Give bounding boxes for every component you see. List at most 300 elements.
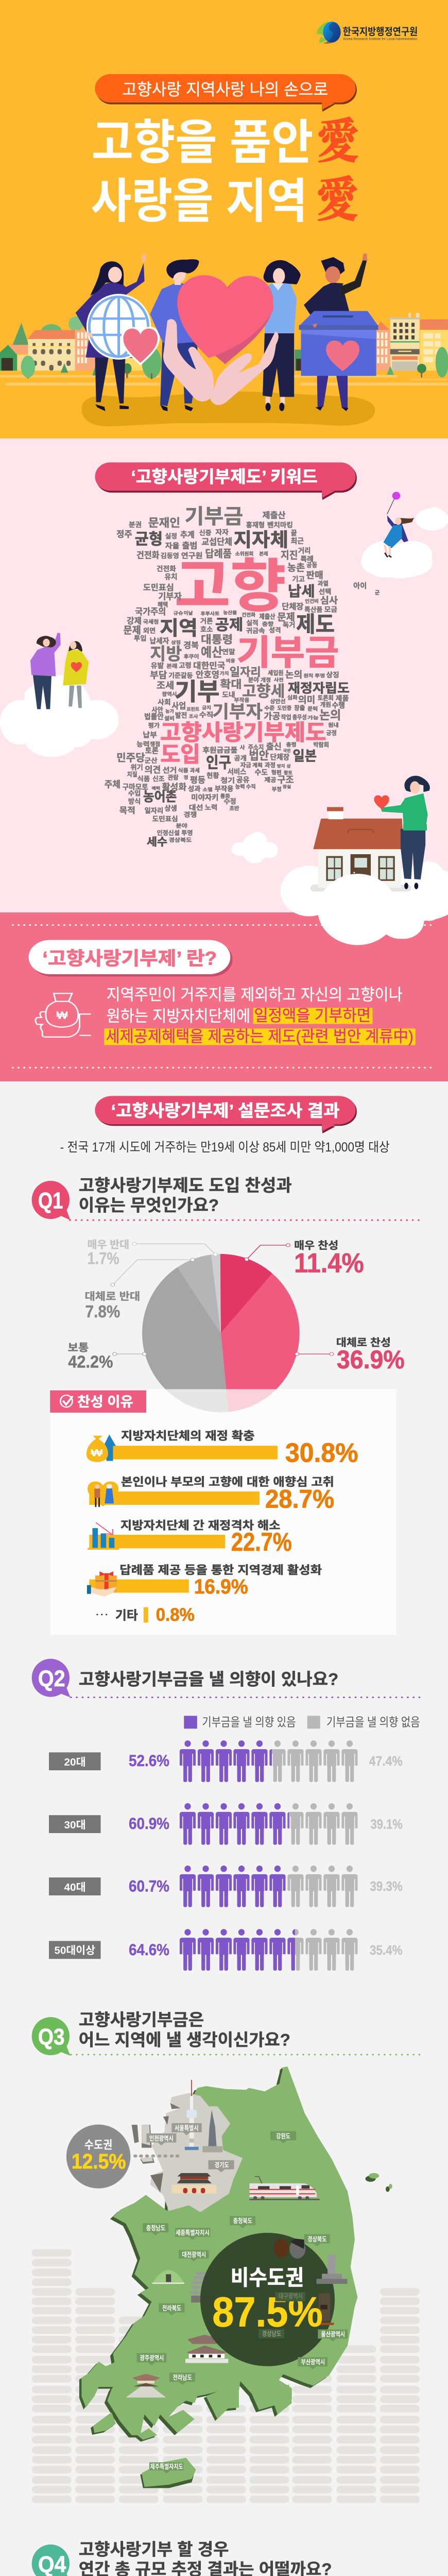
word cloud: 선택 bbox=[319, 588, 331, 596]
heading: Q1: 고향사랑기부제도 도입 찬성과 bbox=[79, 1176, 292, 1195]
word cloud: 수준 bbox=[264, 705, 275, 711]
callout: somewhat favorable bbox=[295, 1337, 405, 1374]
word cloud: 사 bbox=[240, 744, 245, 751]
word cloud: 기부자 bbox=[158, 591, 182, 601]
word cloud: 능력 bbox=[136, 740, 150, 748]
word cloud: 아이 bbox=[353, 582, 367, 590]
word cloud: 관람 bbox=[168, 774, 179, 781]
word cloud: 교섭단체 bbox=[201, 537, 232, 547]
section: Q4 bbox=[32, 2540, 421, 2576]
text block: definition: 일정액을 기부하면 bbox=[254, 1007, 371, 1025]
badge: Q2 bbox=[32, 1659, 71, 1698]
word cloud: 일자리 bbox=[145, 807, 163, 815]
word cloud: 유치 bbox=[164, 573, 177, 581]
text block: definition: 원하는 지방자치단체에 bbox=[107, 1008, 250, 1025]
bar: other bbox=[96, 1605, 195, 1625]
map labels: regions: 경기도 bbox=[215, 2161, 229, 2168]
bar: local economy: 답례품 제공 등을 통한 지역경제 활성화 bbox=[119, 1564, 322, 1577]
word cloud: 수입 bbox=[128, 789, 141, 797]
map labels: regions: 경상북도 bbox=[307, 2235, 326, 2243]
legend bbox=[184, 1715, 420, 1729]
section: Q3 bbox=[32, 2010, 421, 2503]
icon: cheomseongdae, pagoda, tomb, temples bbox=[126, 2270, 228, 2398]
word cloud: 김동영 bbox=[161, 552, 179, 560]
word cloud: 위기 bbox=[130, 763, 143, 771]
person: woman in light blue bbox=[263, 260, 301, 411]
word cloud: 소위원회 bbox=[235, 551, 253, 557]
word cloud: 유발 bbox=[151, 662, 164, 669]
word cloud: 과세 bbox=[190, 767, 200, 774]
map labels: regions: 강원도 bbox=[276, 2132, 290, 2140]
word cloud: 수직 bbox=[199, 710, 213, 719]
word cloud: 자율 bbox=[165, 542, 180, 550]
word cloud: 충향 bbox=[262, 621, 273, 628]
title: 愛 bbox=[316, 162, 358, 230]
pictogram row: age 30s: 60.9% bbox=[129, 1815, 169, 1833]
word cloud: 미야자키 bbox=[191, 794, 218, 802]
word cloud: 부작용 bbox=[234, 698, 250, 704]
word cloud: 기준갈등 bbox=[168, 672, 193, 679]
callout: somewhat favorable: 36.9% bbox=[337, 1345, 405, 1374]
word cloud: 연구원 bbox=[181, 552, 202, 560]
word cloud: 활성화 bbox=[162, 782, 186, 792]
icon: hand holding money bag: ₩ bbox=[56, 1009, 68, 1021]
word cloud: 최근 bbox=[290, 537, 304, 546]
word cloud: 기부자 bbox=[212, 702, 263, 722]
word cloud: 조세 bbox=[157, 680, 174, 691]
word cloud: 단체장 bbox=[282, 602, 304, 611]
word cloud: 법안 bbox=[249, 749, 269, 762]
bar: fiscal expansion bbox=[87, 1430, 358, 1468]
word cloud: 납부 bbox=[143, 731, 157, 739]
word cloud: 문제 bbox=[277, 612, 295, 623]
map labels: regions: 서울특별시 bbox=[175, 2125, 199, 2132]
word cloud: 정주 bbox=[116, 530, 132, 539]
word cloud: 지방 bbox=[150, 645, 182, 664]
heading: Q4 bbox=[79, 2540, 332, 2576]
word cloud: 목적 bbox=[119, 806, 135, 815]
bar: closing fiscal gap: 22.7% bbox=[231, 1528, 292, 1556]
bar: other: 기타 bbox=[115, 1608, 138, 1622]
map labels: regions: 전라남도 bbox=[173, 2374, 192, 2381]
word cloud: 구마모토 bbox=[123, 783, 148, 791]
logo: top: 한국지방행정연구원 bbox=[343, 26, 418, 38]
word cloud: 문턱 bbox=[307, 706, 318, 712]
heading: what is the donation system pill bbox=[29, 940, 233, 977]
word cloud: 부작용 bbox=[215, 785, 234, 793]
word cloud: 건전화 bbox=[242, 612, 255, 618]
pictogram row: age 40s bbox=[49, 1866, 403, 1907]
word cloud: 식품 bbox=[137, 775, 150, 783]
word cloud: 식품 bbox=[178, 768, 188, 774]
word cloud: 고향 bbox=[175, 554, 286, 618]
map labels: regions: 제주특별자치도 bbox=[150, 2463, 183, 2470]
word cloud: 기부 bbox=[175, 679, 220, 706]
word cloud: 자금 bbox=[240, 762, 251, 769]
word cloud: 외면 bbox=[143, 627, 156, 634]
map labels: regions: 인천광역시 bbox=[149, 2134, 174, 2142]
map labels: regions: 부산광역시 bbox=[301, 2359, 325, 2366]
legend: 기부금을 낼 의향 있음 bbox=[202, 1715, 296, 1729]
word cloud: 기부금 bbox=[184, 504, 243, 528]
pictogram row: age 50 and over: 35.4% bbox=[370, 1943, 403, 1958]
panel: survey background bbox=[0, 1081, 448, 2576]
word cloud: 국가주의 bbox=[135, 607, 166, 617]
word cloud: 능력 bbox=[235, 784, 245, 790]
word cloud: 인정신설 투명 bbox=[157, 830, 193, 836]
word cloud: 방식 bbox=[128, 798, 141, 805]
illustration: town buildings bbox=[0, 313, 448, 385]
word cloud: 공동 bbox=[306, 562, 317, 569]
word cloud: 법률안 bbox=[144, 713, 164, 721]
callout: survey heading bubble bbox=[95, 1096, 357, 1133]
bar: closing fiscal gap bbox=[88, 1519, 292, 1556]
word cloud: 쟁점 bbox=[150, 741, 160, 748]
word cloud: 비용 bbox=[226, 658, 235, 664]
bar: hometown affection: 28.7% bbox=[265, 1485, 334, 1513]
word cloud: 총무성 bbox=[292, 714, 307, 721]
word cloud: 계획 bbox=[252, 762, 263, 769]
callout: keyword heading bubble: ‘고향사랑기부제도’ 키워드 bbox=[131, 468, 318, 486]
word cloud: 본래 bbox=[259, 551, 268, 557]
word cloud: 의견 bbox=[145, 765, 161, 775]
word cloud: 부담 bbox=[150, 670, 167, 680]
word cloud: 수행 bbox=[332, 702, 345, 710]
map labels: regions: 울산광역시 bbox=[321, 2331, 345, 2338]
word cloud: 농가 bbox=[165, 708, 174, 714]
word cloud: 공제 bbox=[215, 617, 243, 633]
word cloud: 설비 bbox=[164, 715, 175, 722]
word cloud: 초반 bbox=[230, 805, 239, 811]
word cloud: 세수 bbox=[147, 836, 167, 848]
word cloud: 혜택 bbox=[158, 602, 168, 608]
stat: non-capital area share: 87.5% bbox=[212, 2289, 323, 2335]
word cloud: 수정 bbox=[223, 798, 236, 805]
pictogram row: age 50 and over: 50대이상 bbox=[55, 1944, 95, 1956]
bar: fiscal expansion: 지방자치단체의 재정 확충 bbox=[121, 1430, 254, 1443]
badge: Q4 bbox=[32, 2545, 71, 2576]
word cloud: 고령 bbox=[179, 661, 192, 669]
word cloud bbox=[105, 504, 380, 848]
word cloud: 호소 bbox=[200, 625, 213, 633]
word cloud: 본래 bbox=[166, 663, 177, 669]
word cloud: 문재인 bbox=[148, 516, 180, 529]
badge: Q1: Q1 bbox=[38, 1188, 63, 1213]
callout: somewhat opposed bbox=[84, 1258, 195, 1321]
word cloud: 금지 bbox=[202, 705, 211, 710]
word cloud: 노력 bbox=[205, 804, 217, 811]
bar: fiscal expansion: 30.8% bbox=[285, 1438, 358, 1468]
callout: somewhat opposed: 7.8% bbox=[85, 1302, 120, 1321]
stat: capital area share: 수도권 bbox=[84, 2139, 112, 2151]
callout: very favorable: 11.4% bbox=[294, 1248, 364, 1278]
word cloud: 가치 bbox=[220, 671, 229, 676]
word cloud: 규슈 bbox=[174, 611, 183, 616]
word cloud: 도민표심 bbox=[143, 583, 174, 592]
callout: somewhat favorable: 대체로 찬성 bbox=[336, 1337, 391, 1348]
tag: reasons for support: 찬성 이유 bbox=[77, 1394, 133, 1410]
word cloud: 민주당 bbox=[116, 752, 145, 764]
callout: keyword heading bubble bbox=[95, 462, 357, 500]
word cloud: 일본 bbox=[292, 749, 317, 764]
word cloud: 청기 bbox=[220, 776, 235, 784]
word cloud: 이날 bbox=[184, 610, 193, 616]
word cloud: 사전 bbox=[274, 677, 284, 682]
word cloud: 홍재형 bbox=[246, 521, 265, 529]
logo: top: Korea Research Institute for Local Administration bbox=[343, 38, 418, 41]
pictogram row: age 40s: 39.3% bbox=[370, 1879, 403, 1894]
word cloud: 신조 bbox=[152, 775, 165, 783]
word cloud: 거론 bbox=[200, 617, 213, 625]
illustration: house with woman on cloud bbox=[231, 776, 448, 945]
word cloud: 개원 bbox=[320, 701, 331, 708]
word cloud: 인건비 bbox=[305, 598, 319, 604]
callout: very opposed bbox=[87, 1239, 217, 1268]
word cloud: 대통령 bbox=[201, 633, 233, 646]
panel: header background bbox=[0, 0, 448, 438]
word cloud: 경상북도 bbox=[169, 837, 192, 843]
word cloud: 분권 bbox=[129, 521, 142, 529]
word cloud: 균형 bbox=[135, 531, 163, 548]
word cloud: 출신 bbox=[266, 742, 282, 751]
word cloud: 예산 bbox=[201, 645, 222, 659]
word cloud: 단체장 bbox=[270, 753, 290, 761]
word cloud: 삼 bbox=[287, 764, 291, 768]
pie chart: Q1 opinion bbox=[142, 1254, 300, 1412]
word cloud: 거리 bbox=[298, 547, 311, 555]
word cloud: 현황 bbox=[206, 772, 219, 779]
word cloud: 광역시 bbox=[162, 691, 177, 698]
word cloud: 논의 bbox=[285, 669, 302, 680]
word cloud: 판매 bbox=[306, 570, 323, 580]
pictogram row: age 20s: 52.6% bbox=[129, 1752, 169, 1770]
word cloud: 일자리 bbox=[230, 666, 261, 679]
word cloud: 과정 bbox=[265, 761, 275, 769]
pictogram row: age 40s: 60.7% bbox=[129, 1877, 169, 1895]
word cloud: 장실 bbox=[283, 784, 291, 789]
callout: somewhat opposed: 대체로 반대 bbox=[84, 1291, 140, 1302]
word cloud: 도입 bbox=[161, 743, 200, 767]
word cloud: 주소지 bbox=[248, 744, 264, 751]
bar: other: 0.8% bbox=[156, 1605, 195, 1625]
word cloud: 제출산 bbox=[262, 511, 285, 520]
badge: Q2: Q2 bbox=[38, 1665, 65, 1691]
word cloud: 투입 bbox=[134, 634, 146, 642]
stat: capital area share: 12.5% bbox=[72, 2149, 126, 2173]
heading: Q2: 고향사랑기부금을 낼 의향이 있나요? bbox=[79, 1670, 338, 1689]
bar: hometown affection bbox=[88, 1476, 334, 1513]
word cloud: 세입원 bbox=[268, 670, 284, 676]
heading: Q3 bbox=[79, 2010, 290, 2049]
word cloud: 제품 bbox=[336, 694, 349, 702]
word cloud: 대선 bbox=[189, 803, 203, 811]
map labels: regions: 세종특별자치시 bbox=[176, 2229, 210, 2236]
word cloud: 제도 bbox=[296, 613, 335, 637]
callout: very opposed: 매우 반대 bbox=[87, 1239, 129, 1250]
callout: very favorable bbox=[245, 1240, 364, 1278]
word cloud: 독거 bbox=[283, 621, 295, 629]
word cloud: 조사 bbox=[189, 714, 198, 719]
pictogram row: age 30s: 39.1% bbox=[371, 1817, 403, 1832]
word cloud: 고향세 bbox=[242, 683, 285, 700]
word cloud: 도민증 bbox=[277, 705, 291, 711]
icon: big heart bbox=[177, 275, 273, 364]
word cloud: 강제 bbox=[127, 616, 142, 626]
map labels: regions: 충청북도 bbox=[233, 2217, 252, 2225]
bar: fiscal expansion: ₩ bbox=[91, 1447, 103, 1459]
title: 고향을 품안 bbox=[92, 115, 313, 170]
word cloud: 확대 bbox=[220, 679, 242, 690]
word cloud: 귀금속 bbox=[246, 627, 265, 634]
word cloud: 공유 bbox=[236, 776, 250, 784]
word cloud: 부정 bbox=[272, 787, 282, 793]
word cloud: 의미 bbox=[298, 694, 315, 705]
word cloud: 후쿠이 bbox=[184, 653, 199, 660]
illustration: two women on cloud bbox=[0, 633, 119, 757]
word cloud: 사회 bbox=[158, 698, 171, 706]
word cloud: 투명 bbox=[315, 673, 325, 678]
word cloud: 농어촌 bbox=[143, 789, 177, 804]
heading: Q3: 고향사랑기부금은 bbox=[79, 2010, 204, 2029]
word cloud: 자자 bbox=[215, 528, 229, 536]
word cloud: 문제 bbox=[123, 625, 141, 636]
callout: slogan bubble bbox=[95, 74, 357, 112]
callout: neutral: 42.2% bbox=[68, 1352, 113, 1371]
pictogram row: age 30s bbox=[49, 1803, 403, 1845]
word cloud: 납세 bbox=[288, 584, 315, 600]
word cloud: 후원금금품 bbox=[202, 747, 237, 755]
map labels: regions: 충청남도 bbox=[146, 2224, 165, 2232]
panel: reasons for support bbox=[50, 1389, 397, 1635]
callout: survey heading bubble: ‘고향사랑기부제’ 설문조사 결과 bbox=[111, 1101, 339, 1120]
section: Q2 bbox=[32, 1659, 421, 1907]
cloud overlay on definition panel bbox=[318, 874, 424, 945]
map overlay: non-capital circle bbox=[200, 2233, 347, 2366]
map labels: regions: 광주광역시 bbox=[140, 2354, 164, 2362]
title bbox=[91, 104, 359, 230]
illustration: town and people with hearts bbox=[0, 253, 448, 427]
pictogram row: age 20s: 20대 bbox=[64, 1756, 86, 1768]
word cloud: 심화 bbox=[287, 694, 298, 701]
word cloud: 치질 bbox=[127, 772, 137, 778]
word cloud: 사업 bbox=[171, 701, 186, 710]
bar: closing fiscal gap: 지방자치단체 간 재정격차 해소 bbox=[120, 1519, 280, 1532]
word cloud: 상징 bbox=[171, 639, 181, 645]
heading: Q3: 어느 지역에 낼 생각이신가요? bbox=[79, 2030, 290, 2049]
word cloud: 황토 bbox=[284, 770, 292, 775]
word cloud: 총평 bbox=[286, 742, 297, 748]
word cloud: 제공 bbox=[264, 776, 277, 783]
tag: reasons for support bbox=[50, 1391, 146, 1413]
word cloud: 성격 bbox=[269, 626, 281, 634]
word cloud: 가공 bbox=[264, 711, 280, 721]
heading: Q4: 고향사랑기부 할 경우 bbox=[79, 2540, 229, 2558]
illustration: ground shadow bbox=[81, 392, 375, 427]
word cloud: 도민표심 bbox=[152, 815, 178, 823]
person: woman with globe bbox=[76, 253, 160, 411]
callout: very opposed: 1.7% bbox=[87, 1249, 119, 1268]
icon: hand holding money bag bbox=[36, 993, 91, 1037]
word cloud: 대한민국 bbox=[193, 661, 225, 670]
word cloud: 상생 bbox=[164, 804, 177, 812]
map labels: regions bbox=[137, 2123, 348, 2473]
map labels: regions: 대전광역시 bbox=[182, 2251, 206, 2258]
word cloud: 경쟁 bbox=[184, 811, 197, 819]
stat: capital area share bbox=[66, 2125, 179, 2189]
word cloud: 고향사랑기부제도 bbox=[160, 721, 326, 745]
word cloud: 벤치마킹 bbox=[267, 521, 293, 529]
word cloud: 연말 bbox=[222, 648, 235, 655]
word cloud: 실정 bbox=[165, 532, 177, 540]
word cloud: 사안 bbox=[151, 706, 163, 714]
pictogram row: age 20s: 47.4% bbox=[369, 1754, 403, 1769]
word cloud: 성과 bbox=[188, 785, 201, 793]
divider dots bbox=[13, 925, 436, 1067]
bar: local economy: 16.9% bbox=[194, 1574, 248, 1598]
word cloud: 끝 bbox=[290, 529, 297, 537]
word cloud: 국세청 bbox=[143, 619, 159, 625]
section: Q1 bbox=[32, 1176, 419, 1635]
word cloud: 안호영 bbox=[196, 670, 219, 680]
word cloud: 군 bbox=[375, 590, 380, 596]
heading: what is the donation system pill: ‘고향사랑기부제’ 란? bbox=[42, 948, 217, 969]
word cloud: 기부금 bbox=[236, 634, 339, 672]
word cloud: 지자체 bbox=[233, 530, 288, 551]
word cloud: 분야 bbox=[248, 676, 259, 683]
word cloud: 원내 bbox=[328, 722, 339, 728]
panel: definition background bbox=[0, 912, 448, 1081]
word cloud: 상안선 bbox=[270, 698, 285, 705]
word cloud: 방지 bbox=[277, 764, 285, 768]
word cloud: 상징 bbox=[326, 671, 339, 679]
callout: neutral: 보통 bbox=[68, 1342, 89, 1353]
word cloud: 제출산 bbox=[259, 613, 275, 620]
map labels: regions: 경상남도 bbox=[262, 2330, 281, 2337]
icon: cupped hands bbox=[163, 319, 279, 405]
map labels: regions: 전라북도 bbox=[162, 2304, 181, 2312]
word cloud: 특례 bbox=[300, 555, 314, 563]
badge: Q3 bbox=[32, 2017, 71, 2056]
word cloud: 도내 bbox=[222, 691, 235, 699]
heading: Q1: 이유는 무엇인가요? bbox=[79, 1196, 219, 1215]
word cloud: 특산품 bbox=[304, 606, 322, 614]
pictogram row: age 40s: 40대 bbox=[64, 1881, 86, 1893]
callout: slogan bubble: 고향사랑 지역사랑 나의 손으로 bbox=[122, 81, 328, 99]
title: 愛 bbox=[317, 104, 359, 172]
word cloud: 건전화 bbox=[136, 550, 159, 560]
word cloud: 답례품 bbox=[205, 548, 232, 560]
word cloud: 논의 bbox=[319, 708, 341, 722]
heading: Q1 bbox=[79, 1176, 292, 1215]
word cloud: 분야 bbox=[176, 823, 187, 829]
word cloud: 수도 bbox=[254, 769, 268, 777]
word cloud: 박람회 bbox=[313, 741, 329, 748]
word cloud: 인구 bbox=[206, 754, 231, 771]
word cloud: 후루사토 bbox=[200, 611, 219, 616]
badge: Q3: Q3 bbox=[38, 2024, 65, 2049]
word cloud: 군산 bbox=[145, 757, 158, 764]
callout: neutral bbox=[68, 1342, 146, 1371]
word cloud: 주체 bbox=[105, 779, 120, 789]
illustration: girl with balloon on cloud bbox=[361, 492, 448, 579]
word cloud: 서비스 bbox=[228, 768, 247, 776]
icon: seoul tower bbox=[185, 2080, 199, 2150]
word cloud: 통화 bbox=[220, 793, 230, 800]
word cloud: 모금 bbox=[324, 605, 337, 614]
map: South Korea bbox=[79, 2066, 392, 2488]
word cloud: 개정 bbox=[261, 677, 271, 683]
pictogram row: age 30s: 30대 bbox=[64, 1819, 86, 1831]
